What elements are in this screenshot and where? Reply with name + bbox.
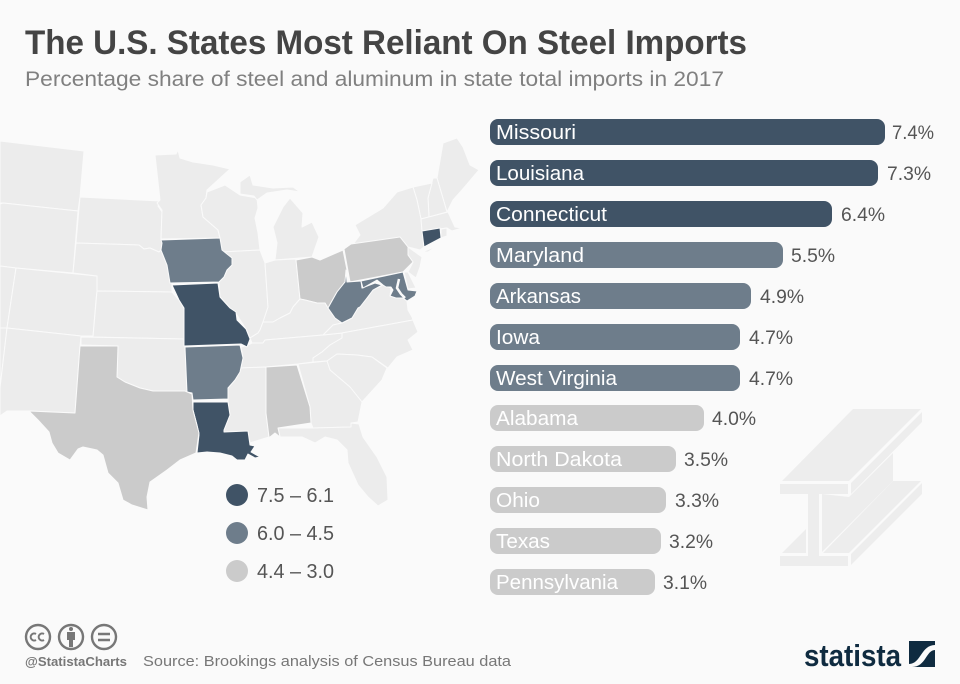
bar: Alabama: [490, 405, 756, 431]
legend item: 7.5 to 6.1: 7.5 – 6.1: [257, 485, 334, 507]
Chesapeake Bay: [397, 279, 405, 298]
source: Source: Brookings analysis of Census Bureau data: [143, 653, 512, 670]
state: Michigan lower peninsula: [273, 198, 319, 260]
bar: Pennsylvania: Pennsylvania: [496, 572, 619, 594]
state: Kansas: [93, 291, 184, 339]
state: West Virginia: [328, 270, 382, 323]
state: Kentucky: [250, 299, 342, 343]
map legend: [226, 484, 334, 583]
bar: Iowa: [490, 324, 793, 350]
bar: Iowa: 4.7%: [749, 328, 793, 349]
bar: Pennsylvania: 3.1%: [663, 573, 707, 594]
bar: Pennsylvania: [490, 569, 707, 595]
state: New York: [351, 187, 424, 250]
state: Michigan upper peninsula: [240, 175, 300, 200]
bar: Connecticut: 6.4%: [841, 205, 885, 226]
state: Florida: [278, 423, 388, 506]
state: Nebraska: [73, 243, 172, 292]
bar: West Virginia: West Virginia: [496, 368, 618, 390]
state: Ohio: [296, 250, 347, 308]
subtitle: Percentage share of steel and aluminum in state total imports in 2017: [25, 68, 724, 91]
state: Rhode Island: [441, 228, 447, 238]
state: Wyoming: [0, 203, 78, 273]
bar: Arkansas: [490, 283, 804, 309]
state: Long Island: [422, 246, 437, 252]
state: Tennessee: [240, 333, 342, 368]
state: Arkansas: [185, 345, 243, 400]
bar: Alabama: Alabama: [496, 408, 579, 430]
bar: Ohio: 3.3%: [675, 491, 719, 512]
state: Colorado: [7, 268, 97, 336]
icon: Creative Commons licence badges: [26, 625, 116, 649]
state: Illinois: [219, 250, 268, 338]
bar: Arkansas: 4.9%: [760, 287, 804, 308]
bar: Missouri: Missouri: [496, 122, 576, 144]
state: Missouri: [172, 283, 250, 347]
state: Mississippi: [224, 367, 269, 443]
bar: Maryland: 5.5%: [791, 246, 835, 267]
bar chart: [490, 119, 934, 595]
state: North Carolina: [313, 320, 418, 368]
state: Oklahoma: [81, 337, 187, 392]
bar: Arkansas: Arkansas: [496, 286, 581, 308]
bar: Louisiana: [490, 160, 931, 186]
bar: Iowa: Iowa: [496, 327, 541, 349]
legend item: 6.0 to 4.5: 6.0 – 4.5: [257, 523, 334, 545]
bar: North Dakota: North Dakota: [496, 449, 623, 471]
legend item: 4.4 to 3.0: 4.4 – 3.0: [257, 561, 334, 583]
state: Vermont: [413, 183, 432, 219]
state: Minnesota: [155, 150, 230, 239]
state: Louisiana: [193, 402, 260, 460]
state: South Carolina: [327, 354, 387, 402]
bar: Texas: Texas: [496, 531, 550, 553]
bar: Texas: 3.2%: [669, 532, 713, 553]
bar: Connecticut: Connecticut: [496, 204, 607, 226]
state: Maine: [437, 138, 479, 212]
state: Texas: [29, 346, 199, 510]
bar: Ohio: [490, 487, 719, 513]
map of US states: [0, 138, 479, 510]
bar: Louisiana: 7.3%: [887, 164, 931, 185]
title: The U.S. States Most Reliant On Steel Imports: [25, 24, 747, 62]
state: Montana: [0, 141, 84, 211]
state: New Jersey: [408, 247, 422, 278]
bar: Ohio: Ohio: [496, 490, 540, 512]
bar: North Dakota: [490, 446, 728, 472]
state: Massachusetts: [421, 212, 462, 231]
state: Wisconsin: [201, 185, 260, 252]
state: Indiana: [263, 259, 300, 322]
state: Iowa: [161, 238, 232, 283]
bar: Connecticut: [490, 201, 885, 227]
state: Alabama: [266, 365, 311, 437]
state: Pennsylvania: [344, 237, 413, 282]
bar: Alabama: 4.0%: [712, 409, 756, 430]
state: South Dakota: [76, 197, 162, 252]
bar: North Dakota: 3.5%: [684, 450, 728, 471]
state: Utah: [0, 266, 16, 328]
state: Connecticut: [422, 228, 441, 247]
handle: @StatistaCharts: [25, 654, 127, 669]
bar: West Virginia: [490, 365, 793, 391]
state: Virginia: [323, 285, 413, 335]
bar: Texas: [490, 528, 713, 554]
state: Georgia: [298, 361, 362, 428]
state: Arizona: [0, 328, 7, 388]
state: Delaware: [404, 272, 416, 289]
Statista logo: statista: [804, 638, 902, 673]
state: New Mexico: [0, 328, 81, 416]
state: Maryland: [361, 272, 417, 301]
bar: Missouri: 7.4%: [892, 123, 934, 144]
bar: Maryland: [490, 242, 835, 268]
state: New Hampshire: [428, 178, 447, 217]
icon: steel I-beam: [780, 409, 922, 566]
bar: Louisiana: Louisiana: [496, 163, 585, 185]
bar: Maryland: Maryland: [496, 245, 584, 267]
bar: Missouri: [490, 119, 934, 145]
bar: West Virginia: 4.7%: [749, 369, 793, 390]
